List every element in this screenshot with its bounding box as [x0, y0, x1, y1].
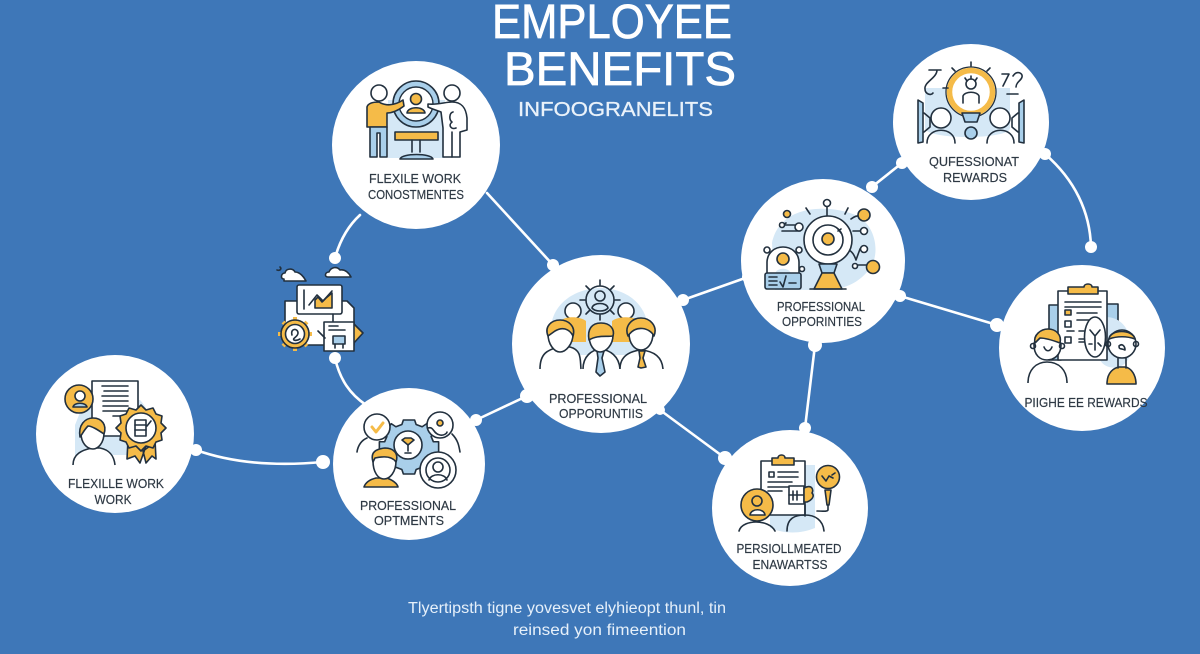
- icon: team with gear: [540, 280, 663, 376]
- title: INFOOGRANELITS: [518, 99, 713, 121]
- icon: clipboard with employees: [1028, 284, 1138, 384]
- label: [360, 499, 456, 528]
- label: PERSIOLLMEATED: [736, 542, 842, 556]
- title: BENEFITS: [504, 42, 736, 95]
- label: PIIGHE EE REWARDS: [1024, 396, 1148, 410]
- footer caption: Tlyertipsth tigne yovesvet elyhieopt thunl, tin: [408, 600, 726, 617]
- panel: professional optments: [333, 388, 485, 540]
- footer caption: [408, 600, 726, 639]
- icon: cloud dashboard with gear: [277, 267, 363, 351]
- label: PROFESSIONAL: [360, 499, 456, 513]
- connector network: [190, 148, 1097, 469]
- label: [68, 477, 165, 507]
- label: [736, 542, 842, 572]
- label: [368, 172, 464, 202]
- icon: certificate with employee: [65, 381, 166, 465]
- label: REWARDS: [943, 171, 1007, 185]
- icon: lightbulb with people: [918, 62, 1024, 143]
- label: PROFESSIONAL: [777, 300, 865, 314]
- icon: gear with team: [357, 412, 460, 488]
- title: [492, 0, 736, 121]
- label: WORK: [94, 493, 132, 507]
- panel: flexille work: [36, 355, 194, 513]
- label: OPTMENTS: [374, 514, 444, 528]
- icon: clipboard and magnifier: [739, 455, 840, 532]
- label: FLEXILE WORK: [369, 172, 462, 186]
- label: PROFESSIONAL: [549, 392, 647, 406]
- label: FLEXILLE WORK: [68, 477, 165, 491]
- label: [777, 300, 865, 329]
- label: ENAWARTSS: [752, 558, 828, 572]
- icon: target lightbulb network: [764, 200, 880, 290]
- label: [929, 155, 1019, 185]
- footer caption: reinsed yon fimeention: [513, 622, 686, 639]
- label: QUFESSIONAT: [929, 155, 1019, 169]
- label: OPPORINTIES: [782, 315, 862, 329]
- panel: right professional opporinties: [741, 179, 905, 343]
- panel: personalized enawartss: [712, 430, 868, 586]
- panel: piighe ee rewards: [999, 265, 1165, 431]
- panel: top-right professional rewards: [893, 44, 1049, 200]
- label: OPPORUNTIIS: [559, 407, 643, 421]
- panel: central professional opporuntiis: [512, 255, 690, 433]
- icon: people around magnifier: [367, 81, 467, 159]
- label: CONOSTMENTES: [368, 188, 464, 202]
- panel: flexile work conostmentes: [332, 61, 500, 229]
- label: [549, 392, 647, 421]
